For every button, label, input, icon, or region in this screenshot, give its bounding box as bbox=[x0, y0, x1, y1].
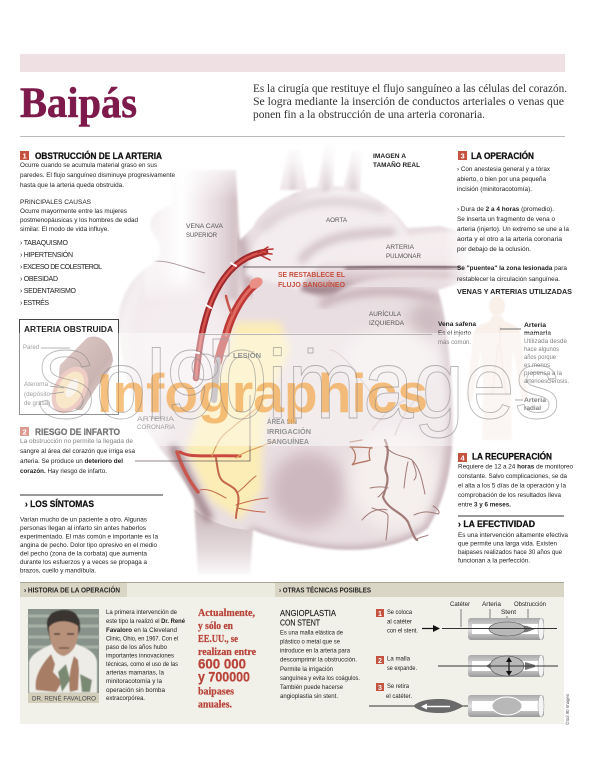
venas y arterias labels: Vena safena bbox=[438, 321, 476, 328]
panel: arteria obstruida bbox=[20, 320, 118, 420]
section 2: riesgo de infarto: La obstrucción no permite la llegada de bbox=[20, 438, 133, 445]
panel: arteria obstruida: (depósito bbox=[24, 391, 50, 398]
text: angioplastia con stent: ANGIOPLASTIA bbox=[280, 609, 337, 618]
heart labels: AORTA bbox=[326, 217, 348, 224]
section: los síntomas: experimentado. El más común e importante es la bbox=[20, 534, 158, 540]
watermark: sol90images: Sol90images bbox=[35, 330, 560, 439]
heart labels: ARTERIA bbox=[386, 244, 415, 251]
heart labels: IZQUIERDA bbox=[369, 320, 405, 327]
label: imagen a tamaño real bbox=[373, 153, 420, 169]
stent diagram labels: Catéter bbox=[450, 601, 471, 608]
venas y arterias labels: años porque bbox=[524, 354, 556, 361]
pulmonary artery bbox=[300, 230, 470, 300]
watermark: infographics: Infographics bbox=[97, 362, 428, 424]
steps text: al catéter bbox=[387, 618, 413, 626]
section 1: obstrucción: › OBESIDAD bbox=[20, 276, 58, 283]
section 4: la recuperación: Requiere de 12 a 24 horas de monitoreo bbox=[458, 464, 573, 470]
section 3: la operación: VENAS Y ARTERIAS UTILIZADAS bbox=[457, 289, 572, 296]
text: angioplastia con stent: Es una malla elástica de bbox=[280, 630, 343, 636]
icon: artery cross-section bbox=[44, 337, 113, 420]
heart labels: SE RESTABLECE EL bbox=[278, 272, 346, 279]
lower vena cava bbox=[194, 508, 252, 576]
leader lines bbox=[135, 267, 460, 461]
section 3: la operación: incisión (minitoracotomía). bbox=[457, 186, 532, 193]
section 3: la operación: Se "puentea" la zona lesionada para bbox=[457, 265, 567, 272]
ischemic yellow area bbox=[186, 322, 290, 520]
section 1: obstrucción: PRINCIPALES CAUSAS bbox=[20, 199, 91, 206]
section 4: la recuperación: LA RECUPERACIÓN bbox=[472, 450, 552, 462]
venas y arterias labels: radial bbox=[524, 405, 541, 412]
section: los síntomas bbox=[20, 494, 163, 574]
section 1: obstrucción: hasta que la arteria queda obstruida. bbox=[20, 182, 124, 189]
text: historia: minitoracotomía y la bbox=[106, 678, 162, 685]
stent diagram labels bbox=[450, 601, 546, 627]
heart illustration bbox=[118, 156, 468, 574]
text: historia: este tipo la realizó el Dr. René bbox=[106, 618, 185, 625]
text: historia: Favaloro en la Cleveland bbox=[106, 627, 177, 634]
lower shading bbox=[250, 291, 452, 550]
heart labels: AURÍCULA bbox=[369, 309, 402, 318]
steps text: Se coloca bbox=[387, 609, 412, 616]
section 1: obstrucción: paredes. El flujo sanguíneo disminuye progresivamente bbox=[20, 172, 175, 179]
text: historia: importantes innovaciones bbox=[106, 652, 174, 660]
text: angioplastia con stent: plástico o metal que se bbox=[280, 638, 340, 646]
section 3: la operación: › Dura de 2 a 4 horas (promedio). bbox=[457, 206, 554, 213]
section 4: la recuperación bbox=[458, 450, 573, 508]
venas y arterias labels: mamaria bbox=[524, 330, 551, 337]
great vessel branches bbox=[289, 169, 357, 196]
copyright: ©Sol 90 Images bbox=[564, 693, 570, 725]
stent diagram labels: Arteria bbox=[482, 601, 501, 608]
text: angioplastia con stent: CON STENT bbox=[280, 618, 320, 628]
section 1: obstrucción: 1 bbox=[22, 152, 27, 160]
header pink bar bbox=[20, 54, 565, 72]
venas y arterias labels: es menos bbox=[524, 362, 550, 369]
text: historia: Clinic, Ohio, en 1967. Con el bbox=[106, 636, 178, 642]
steps text: La malla bbox=[387, 656, 410, 662]
section 3: la operación: arteria (injerto). Un extremo se une a la bbox=[457, 226, 569, 233]
section: la efectividad: › LA EFECTIVIDAD bbox=[458, 519, 535, 530]
section 4: la recuperación: constante. Salvo complicaciones, se da bbox=[458, 473, 567, 480]
heading: otras técnicas: › OTRAS TÉCNICAS POSIBLES bbox=[279, 586, 371, 594]
section: los síntomas: › LOS SÍNTOMAS bbox=[25, 499, 94, 510]
heart labels: CORONARIA bbox=[137, 424, 176, 431]
heart labels: SANGUÍNEA bbox=[267, 437, 309, 446]
section: la efectividad: que permite una larga vida. Existen bbox=[458, 540, 557, 548]
label: imagen a tamaño real: TAMAÑO REAL bbox=[373, 160, 420, 169]
section 3: la operación: LA OPERACIÓN bbox=[471, 150, 534, 161]
section 1: obstrucción: Ocurre mayormente entre las mujeres bbox=[20, 208, 127, 215]
aorta bbox=[245, 190, 415, 290]
intro text: ponen fin a la obstrucción de una arteria coronaria. bbox=[253, 109, 485, 121]
section 3: la operación bbox=[457, 150, 572, 296]
text: historia: extracorpórea. bbox=[106, 695, 145, 702]
watermark band bbox=[0, 333, 595, 446]
section 1: obstrucción: Ocurre cuando se acumula material graso en sus bbox=[20, 162, 157, 169]
photo: Dr. René Favaloro: DR. RENÉ FAVALORO bbox=[32, 694, 96, 702]
steps text: se expande. bbox=[387, 665, 417, 672]
section 1: obstrucción: › SEDENTARISMO bbox=[20, 288, 77, 295]
panel: arteria obstruida: Pared bbox=[23, 344, 39, 351]
right atrium shading bbox=[122, 232, 250, 440]
section 3: la operación: Se inserta un fragmento de vena o bbox=[457, 216, 555, 223]
panel: arteria obstruida: Ateroma bbox=[24, 381, 48, 388]
vena cava bbox=[147, 170, 240, 301]
steps text: con el stent. bbox=[387, 628, 418, 634]
section: los síntomas: del pecho (zona de la corbata) que aumenta bbox=[20, 550, 147, 558]
coronary vessels on right side bbox=[330, 350, 439, 540]
section 1: obstrucción bbox=[20, 150, 175, 307]
section: la efectividad: baipases realizados hace 30 años que bbox=[458, 549, 562, 556]
section 3: la operación: por debajo de la oclusión. bbox=[457, 246, 531, 253]
callout: statistics: 600 000 bbox=[198, 656, 246, 672]
section: los síntomas: durante los esfuerzos y a veces se propaga a bbox=[20, 559, 147, 566]
intro text bbox=[253, 83, 567, 121]
stent diagram: step 3 bbox=[369, 695, 544, 717]
callout: statistics: y sólo en bbox=[198, 621, 233, 632]
section 1: obstrucción: › ESTRÉS bbox=[20, 298, 49, 307]
section 4: la recuperación: el alta a los 5 días de la operación y la bbox=[458, 482, 566, 490]
title: Baipás bbox=[20, 80, 137, 127]
section 2: riesgo de infarto: corazón. Hay riesgo de infarto. bbox=[20, 468, 107, 475]
callout: statistics: baipases bbox=[198, 686, 234, 698]
venas y arterias labels: arterioesclerosis. bbox=[524, 378, 569, 385]
steps text bbox=[376, 609, 418, 700]
section 4: la recuperación: comprobación de los resultados lleva bbox=[458, 492, 561, 499]
venas y arterias labels bbox=[438, 321, 569, 412]
text: historia bbox=[106, 609, 185, 702]
section: los síntomas: brazos, cuello y mandíbula. bbox=[20, 568, 96, 574]
venas y arterias labels: Utilizada desde bbox=[524, 338, 567, 345]
text: angioplastia con stent: descomprimir la obstrucción. bbox=[280, 656, 357, 664]
section: la efectividad bbox=[458, 516, 568, 564]
label: imagen a tamaño real: IMAGEN A bbox=[373, 153, 406, 160]
steps text: 1 bbox=[378, 611, 382, 618]
venas y arterias labels: más común. bbox=[438, 339, 471, 346]
stent diagram labels: Obstrucción bbox=[514, 601, 546, 608]
text: historia: La primera intervención de bbox=[106, 609, 177, 616]
heart labels: VENA CAVA bbox=[186, 223, 224, 230]
steps text: 3 bbox=[378, 685, 382, 692]
text: historia: arterias mamarias, la bbox=[106, 670, 164, 676]
venas y arterias labels: Arteria bbox=[524, 322, 546, 329]
text: angioplastia con stent: Permite la irrigación bbox=[280, 666, 333, 673]
callout: statistics: anuales. bbox=[198, 700, 232, 710]
text: angioplastia con stent: introduce en la arteria para bbox=[280, 648, 350, 654]
stent diagram: step 1 bbox=[422, 618, 557, 640]
heart labels: ARTERIA bbox=[137, 416, 175, 423]
intro text: Es la cirugía que restituye el flujo sanguíneo a las células del corazón. bbox=[253, 83, 567, 95]
venas y arterias labels: propensa a la bbox=[524, 370, 562, 377]
callout: statistics: EE.UU., se bbox=[198, 634, 238, 645]
venas y arterias labels: Arteria bbox=[524, 397, 546, 404]
heart labels: SUPERIOR bbox=[186, 232, 217, 239]
steps text: Se retira bbox=[387, 683, 409, 690]
heart labels: PULMONAR bbox=[386, 253, 421, 260]
coronary artery stub bbox=[214, 275, 265, 400]
stent diagram: step 2 bbox=[438, 655, 558, 677]
section: los síntomas: angina de pecho. Dolor tipo opresivo en el medio bbox=[20, 542, 157, 549]
callout: statistics: y 700000 bbox=[198, 668, 250, 684]
heart labels: IRRIGACIÓN bbox=[267, 427, 311, 436]
section 3: la operación: 3 bbox=[460, 152, 465, 160]
callout: statistics: Actualmente, bbox=[198, 608, 255, 619]
text: historia: paso de los años hubo bbox=[106, 644, 167, 651]
section: la efectividad: funcionan a la perfección. bbox=[458, 558, 530, 564]
text: angioplastia con stent: sanguínea y evita los coágulos. bbox=[280, 675, 360, 682]
heart labels bbox=[137, 217, 421, 446]
section 2: riesgo de infarto: arteria. Se produce un deterioro del bbox=[20, 458, 123, 465]
text: angioplastia con stent: angioplastia sin stent. bbox=[280, 693, 338, 700]
panel: arteria obstruida: ARTERIA OBSTRUIDA bbox=[24, 324, 113, 334]
section 2: riesgo de infarto: RIESGO DE INFARTO bbox=[35, 427, 120, 437]
section 4: la recuperación: entre 3 y 6 meses. bbox=[458, 502, 511, 508]
heading: historia: › HISTORIA DE LA OPERACIÓN bbox=[24, 586, 120, 594]
section: los síntomas: personas llegan al infarto sin antes haberlos bbox=[20, 525, 146, 532]
section: la efectividad: Es una intervención altamente efectiva bbox=[458, 532, 568, 539]
section 2: riesgo de infarto: 2 bbox=[22, 428, 27, 436]
section: los síntomas: Varían mucho de un paciente a otro. Algunas bbox=[20, 516, 147, 524]
stent diagram labels: Stent bbox=[501, 609, 516, 616]
coronary vessels on yellow area bbox=[177, 405, 275, 518]
steps text: 2 bbox=[378, 658, 382, 665]
section 3: la operación: abierto, o bien por una pequeña bbox=[457, 176, 546, 183]
photo: Dr. René Favaloro bbox=[28, 609, 99, 703]
section 1: obstrucción: › TABAQUISMO bbox=[20, 240, 69, 247]
steps text: el catéter. bbox=[386, 693, 412, 700]
section 1: obstrucción: › HIPERTENSIÓN bbox=[20, 250, 73, 259]
text: angioplastia con stent bbox=[280, 609, 360, 700]
panel: bottom background bbox=[20, 582, 564, 724]
bypass graft bbox=[194, 247, 273, 378]
venas y arterias labels: Es el injerto bbox=[438, 330, 471, 337]
text: historia: técnicas, como el uso de las bbox=[106, 661, 178, 668]
section 1: obstrucción: similar. El modo de vida influye. bbox=[20, 226, 109, 233]
figure: human body with vessels bbox=[466, 296, 528, 440]
panel: arteria obstruida: de grasa) bbox=[24, 400, 50, 407]
callout: statistics: realizan entre bbox=[198, 647, 256, 658]
section 1: obstrucción: › EXCESO DE COLESTEROL bbox=[20, 264, 102, 271]
callout: statistics bbox=[198, 608, 256, 710]
text: historia: operación sin bomba bbox=[106, 687, 165, 694]
section 3: la operación: restablecer la circulación sanguínea. bbox=[457, 276, 560, 283]
section 4: la recuperación: 4 bbox=[460, 454, 466, 462]
heart labels: FLUJO SANGUÍNEO bbox=[278, 280, 346, 289]
heart labels: ÁREA SIN bbox=[267, 417, 297, 426]
section 1: obstrucción: OBSTRUCCIÓN DE LA ARTERIA bbox=[35, 150, 162, 161]
section 2: riesgo de infarto bbox=[20, 427, 135, 475]
section 3: la operación: › Con anestesia general y a tórax bbox=[457, 166, 551, 173]
text: angioplastia con stent: También puede hacerse bbox=[280, 684, 343, 691]
section 1: obstrucción: postmenopáusicas y los hombres de edad bbox=[20, 217, 138, 224]
section 3: la operación: aorta y el otro a la arteria coronaria bbox=[457, 236, 562, 243]
heart labels: LESIÓN bbox=[233, 351, 261, 360]
section 2: riesgo de infarto: sangre al área del corazón que irriga esa bbox=[20, 448, 135, 455]
venas y arterias labels: hace algunos bbox=[524, 346, 559, 353]
intro text: Se logra mediante la inserción de conductos arteriales o venas que bbox=[253, 96, 564, 108]
